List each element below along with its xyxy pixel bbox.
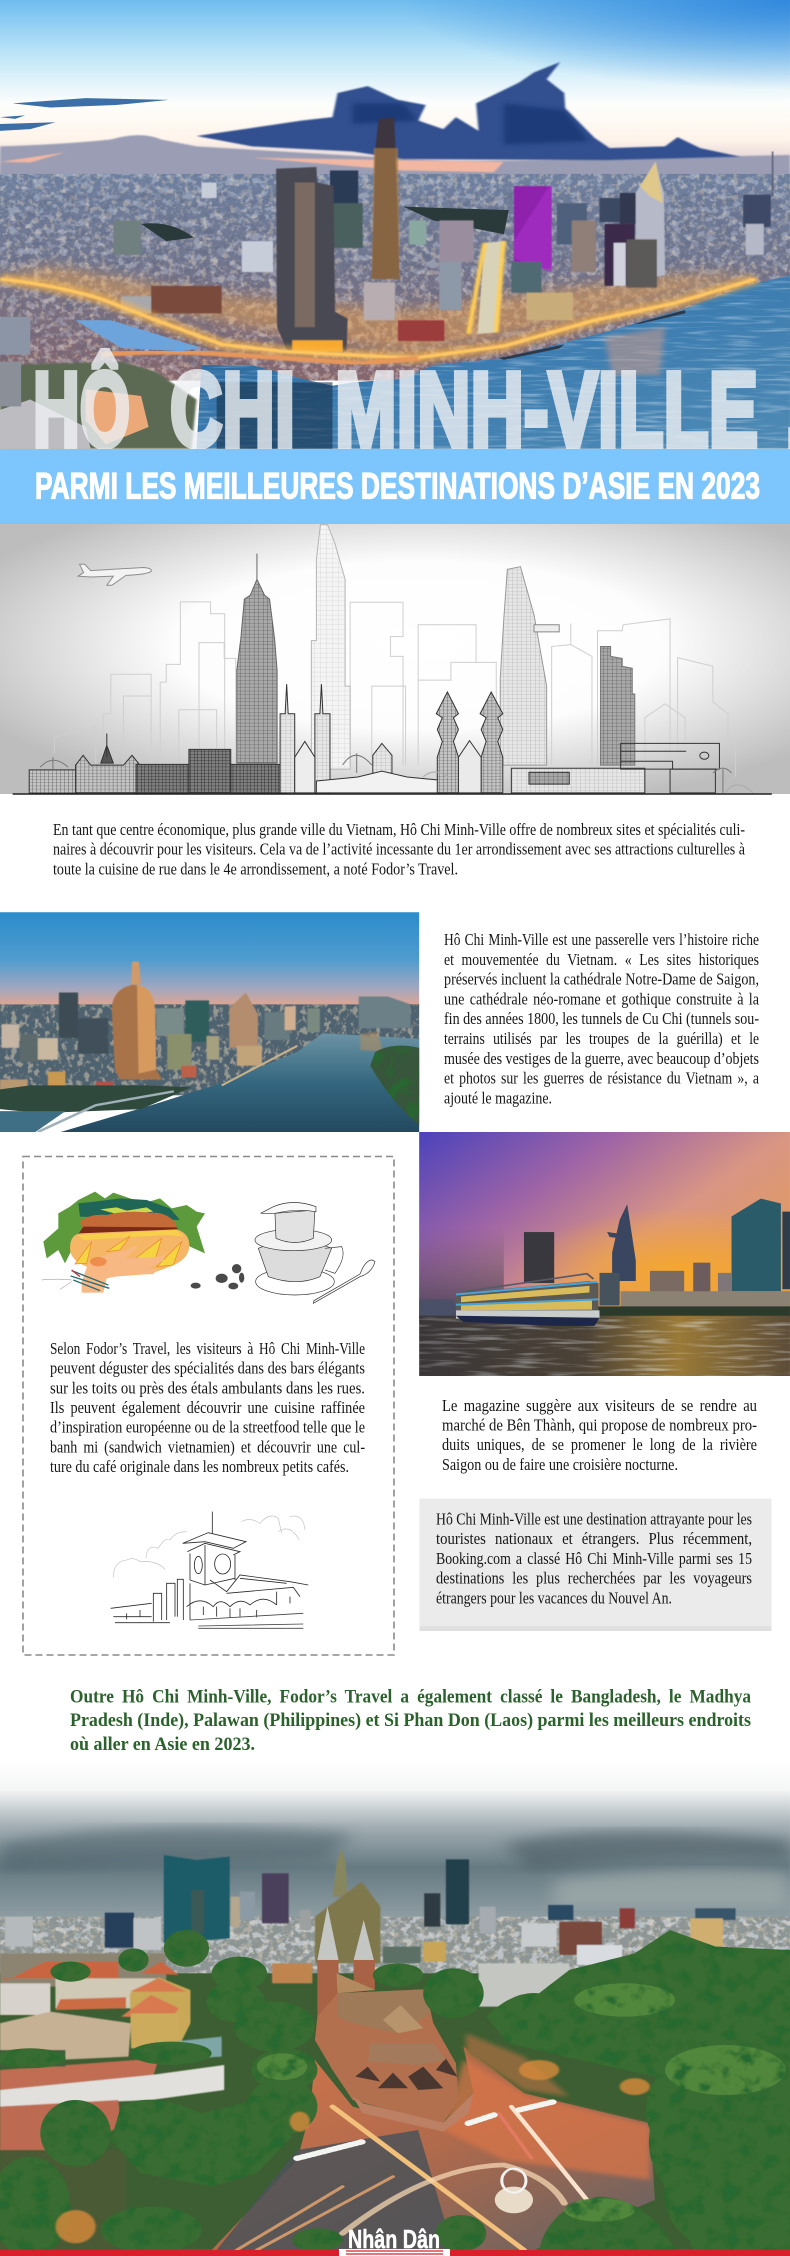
text block: cuisine: ture du café originale dans les nombreux petits cafés. xyxy=(50,1457,349,1476)
Landmark tower xyxy=(311,525,350,769)
text block: market and cruise: Saigon ou de faire une croisière nocturne. xyxy=(442,1455,678,1474)
text block: cuisine: d’inspiration européenne ou de la streetfood telle que le xyxy=(50,1418,365,1437)
highlighted conclusion text: Outre Hô Chi Minh-Ville, Fodor’s Travel a également classé le Bangladesh, le Madhya xyxy=(70,1688,751,1708)
callout: Booking.com ranking: touristes nationaux et étrangers. Plus récemment, xyxy=(436,1529,752,1548)
trees xyxy=(0,1930,790,2256)
text block: cuisine: sur les toits ou près des étals ambulants dans les rues. xyxy=(50,1378,365,1397)
illustration: phin coffee and beans xyxy=(191,1202,375,1303)
logo wordmark: Nhân Dân xyxy=(348,2224,440,2254)
text block: introduction: toute la cuisine de rue dans le 4e arrondissement, a noté Fodor’s Travel. xyxy=(53,859,458,878)
text block: history: ajouté le magazine. xyxy=(444,1088,552,1107)
cathedral xyxy=(315,1907,474,2132)
hero photo: Ho Chi Minh City skyline at dusk xyxy=(0,0,790,449)
text block: history xyxy=(444,930,760,1107)
ground line xyxy=(13,793,772,795)
colonial buildings xyxy=(29,684,719,793)
light trails xyxy=(237,2102,587,2250)
text block: market and cruise xyxy=(442,1396,757,1474)
left bank xyxy=(0,362,196,449)
callout: Booking.com ranking: étrangers pour les vacances du Nouvel An. xyxy=(436,1588,672,1608)
title: Hô Chi Minh-Ville: CHI xyxy=(170,351,295,469)
river xyxy=(196,276,790,449)
highlighted conclusion text: Pradesh (Inde), Palawan (Philippines) et Si Phan Don (Laos) parmi les meilleurs endroits xyxy=(70,1711,751,1731)
photo: Notre-Dame cathedral and downtown xyxy=(0,1760,790,2256)
callout: Booking.com ranking: destinations les plus recherchées par les voyageurs xyxy=(436,1569,752,1588)
text block: cuisine: Selon Fodor’s Travel, les visiteurs à Hô Chi Minh-Ville xyxy=(50,1339,365,1358)
grey right tower xyxy=(601,647,635,765)
street plaza xyxy=(212,2047,655,2250)
footer: red bar with Nhan Dan logo xyxy=(0,2224,790,2256)
callout: Booking.com ranking xyxy=(420,1499,772,1631)
title: Hô Chi Minh-Ville xyxy=(33,351,790,469)
photo: river cruise boat at sunset xyxy=(419,1130,790,1378)
text block: market and cruise: Le magazine suggère aux visiteurs de se rendre au xyxy=(442,1396,757,1415)
text block: introduction xyxy=(53,820,746,878)
cruise boat xyxy=(456,1274,600,1326)
panel: line-art skyline xyxy=(0,524,790,794)
highlighted conclusion text: où aller en Asie en 2023. xyxy=(70,1735,255,1755)
palm trees xyxy=(40,753,732,793)
Bitexco tower xyxy=(500,567,547,765)
left colonial buildings xyxy=(0,1953,224,2250)
grey central tower xyxy=(237,554,277,763)
distant city band xyxy=(0,1916,790,1974)
illustration: banh mi sandwich xyxy=(42,1192,205,1293)
ground base under trees and streets xyxy=(0,1973,790,2250)
subtitle band xyxy=(0,449,790,524)
roundabout ornament xyxy=(495,2169,533,2213)
text block: cuisine: peuvent déguster des spécialités dans des bars élégants xyxy=(50,1359,365,1378)
faint background building outlines xyxy=(54,602,736,777)
airplane xyxy=(78,564,151,585)
towers in the centre xyxy=(113,117,773,352)
photo: river and Bitexco at sunset xyxy=(0,912,419,1132)
text block: cuisine: banh mi (sandwich vietnamien) et découvrir une cul- xyxy=(50,1437,365,1456)
panel: street food, dashed frame xyxy=(23,1156,394,1655)
highlighted conclusion text xyxy=(70,1688,751,1755)
city light shoreline xyxy=(0,279,756,358)
title: Hô Chi Minh-Ville: HÔ xyxy=(33,351,130,469)
text block: market and cruise: marché de Bên Thành, qui propose de nombreux pro- xyxy=(442,1416,757,1435)
text block: cuisine xyxy=(50,1339,365,1476)
text block: cuisine: Ils peuvent également découvrir une cuisine raffinée xyxy=(50,1398,365,1417)
illustration: Ben Thanh market sketch xyxy=(111,1512,308,1628)
